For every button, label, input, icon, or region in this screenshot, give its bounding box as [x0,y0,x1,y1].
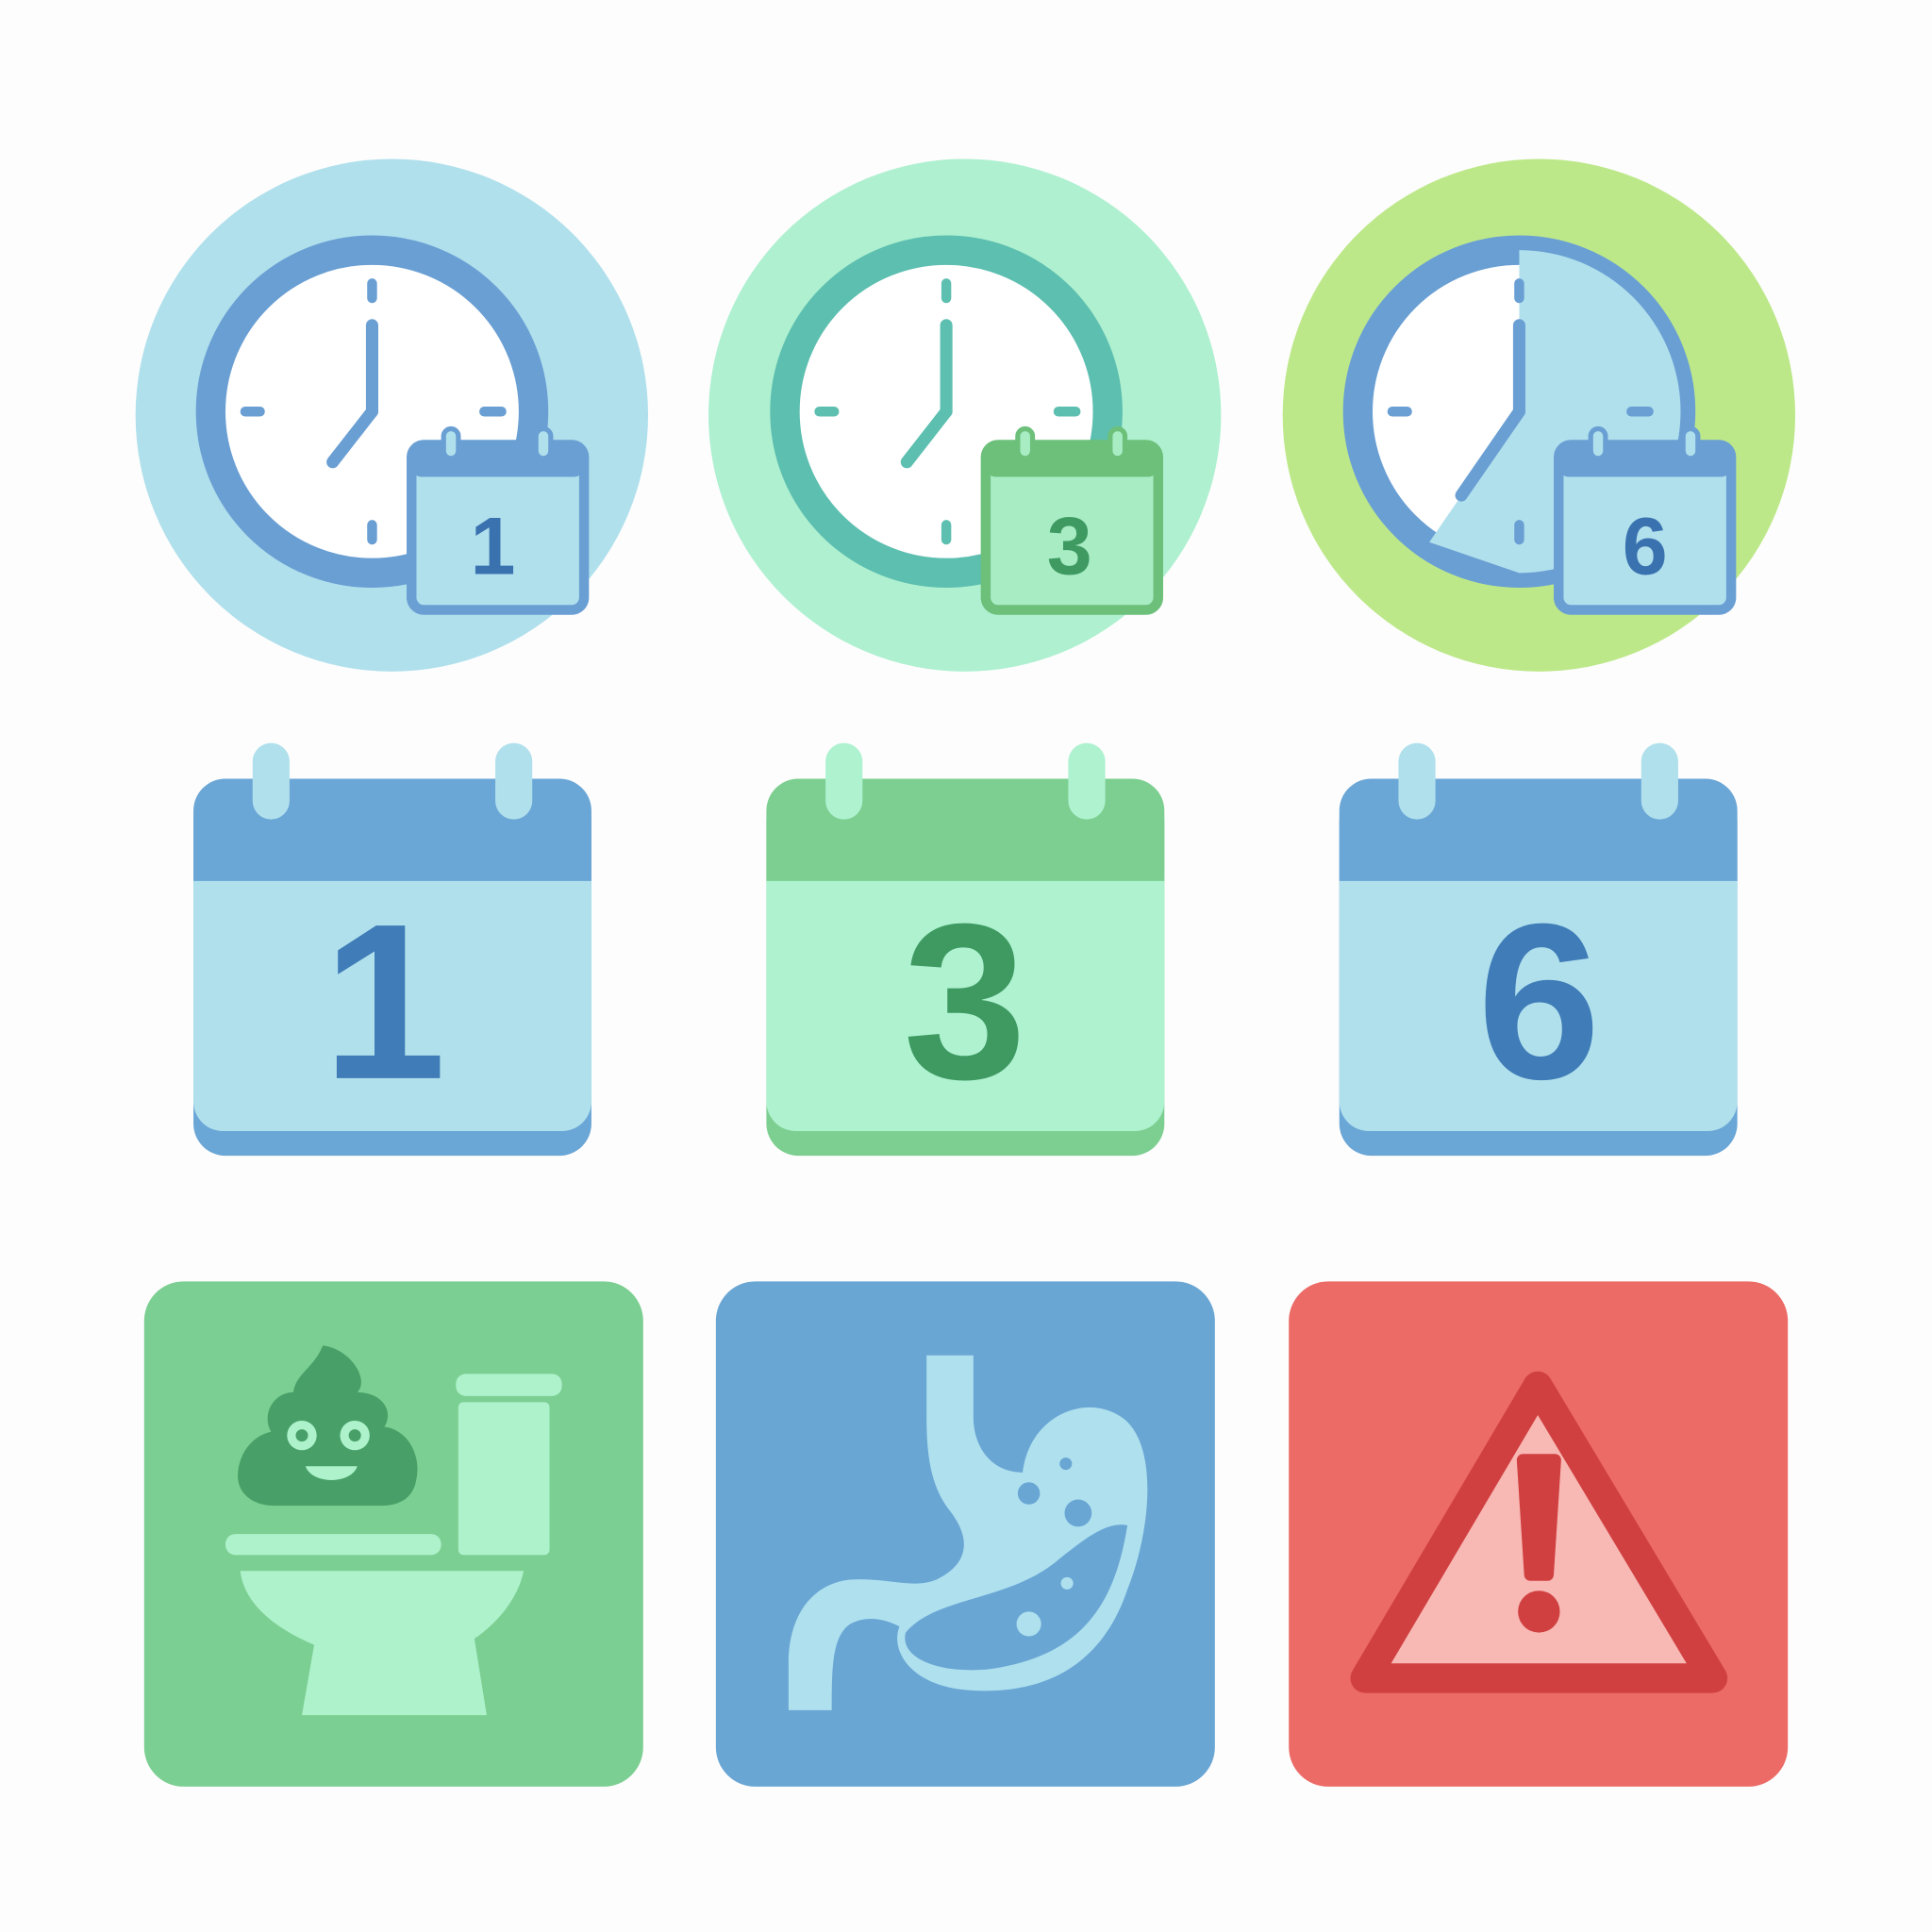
icon: clock with calendar 6 [1283,158,1795,672]
icon: clock with calendar 1: 1 [470,502,515,592]
icon: calendar 1: 1 [323,877,446,1125]
icon: clock with calendar 1 [136,158,648,672]
icon: toilet with poop [144,1281,643,1787]
icon: calendar 1 [193,743,591,1156]
icon: calendar 6: 6 [1477,877,1601,1125]
icon: warning triangle [1289,1281,1788,1787]
icon: clock with calendar 3 [708,158,1221,672]
icon: clock with calendar 3: 3 [1047,502,1092,592]
icon: calendar 6 [1340,743,1738,1156]
icon: stomach [716,1281,1215,1787]
icon: clock with calendar 6: 6 [1623,502,1668,592]
icon: calendar 3: 3 [903,877,1026,1125]
icon: calendar 3 [766,743,1164,1156]
